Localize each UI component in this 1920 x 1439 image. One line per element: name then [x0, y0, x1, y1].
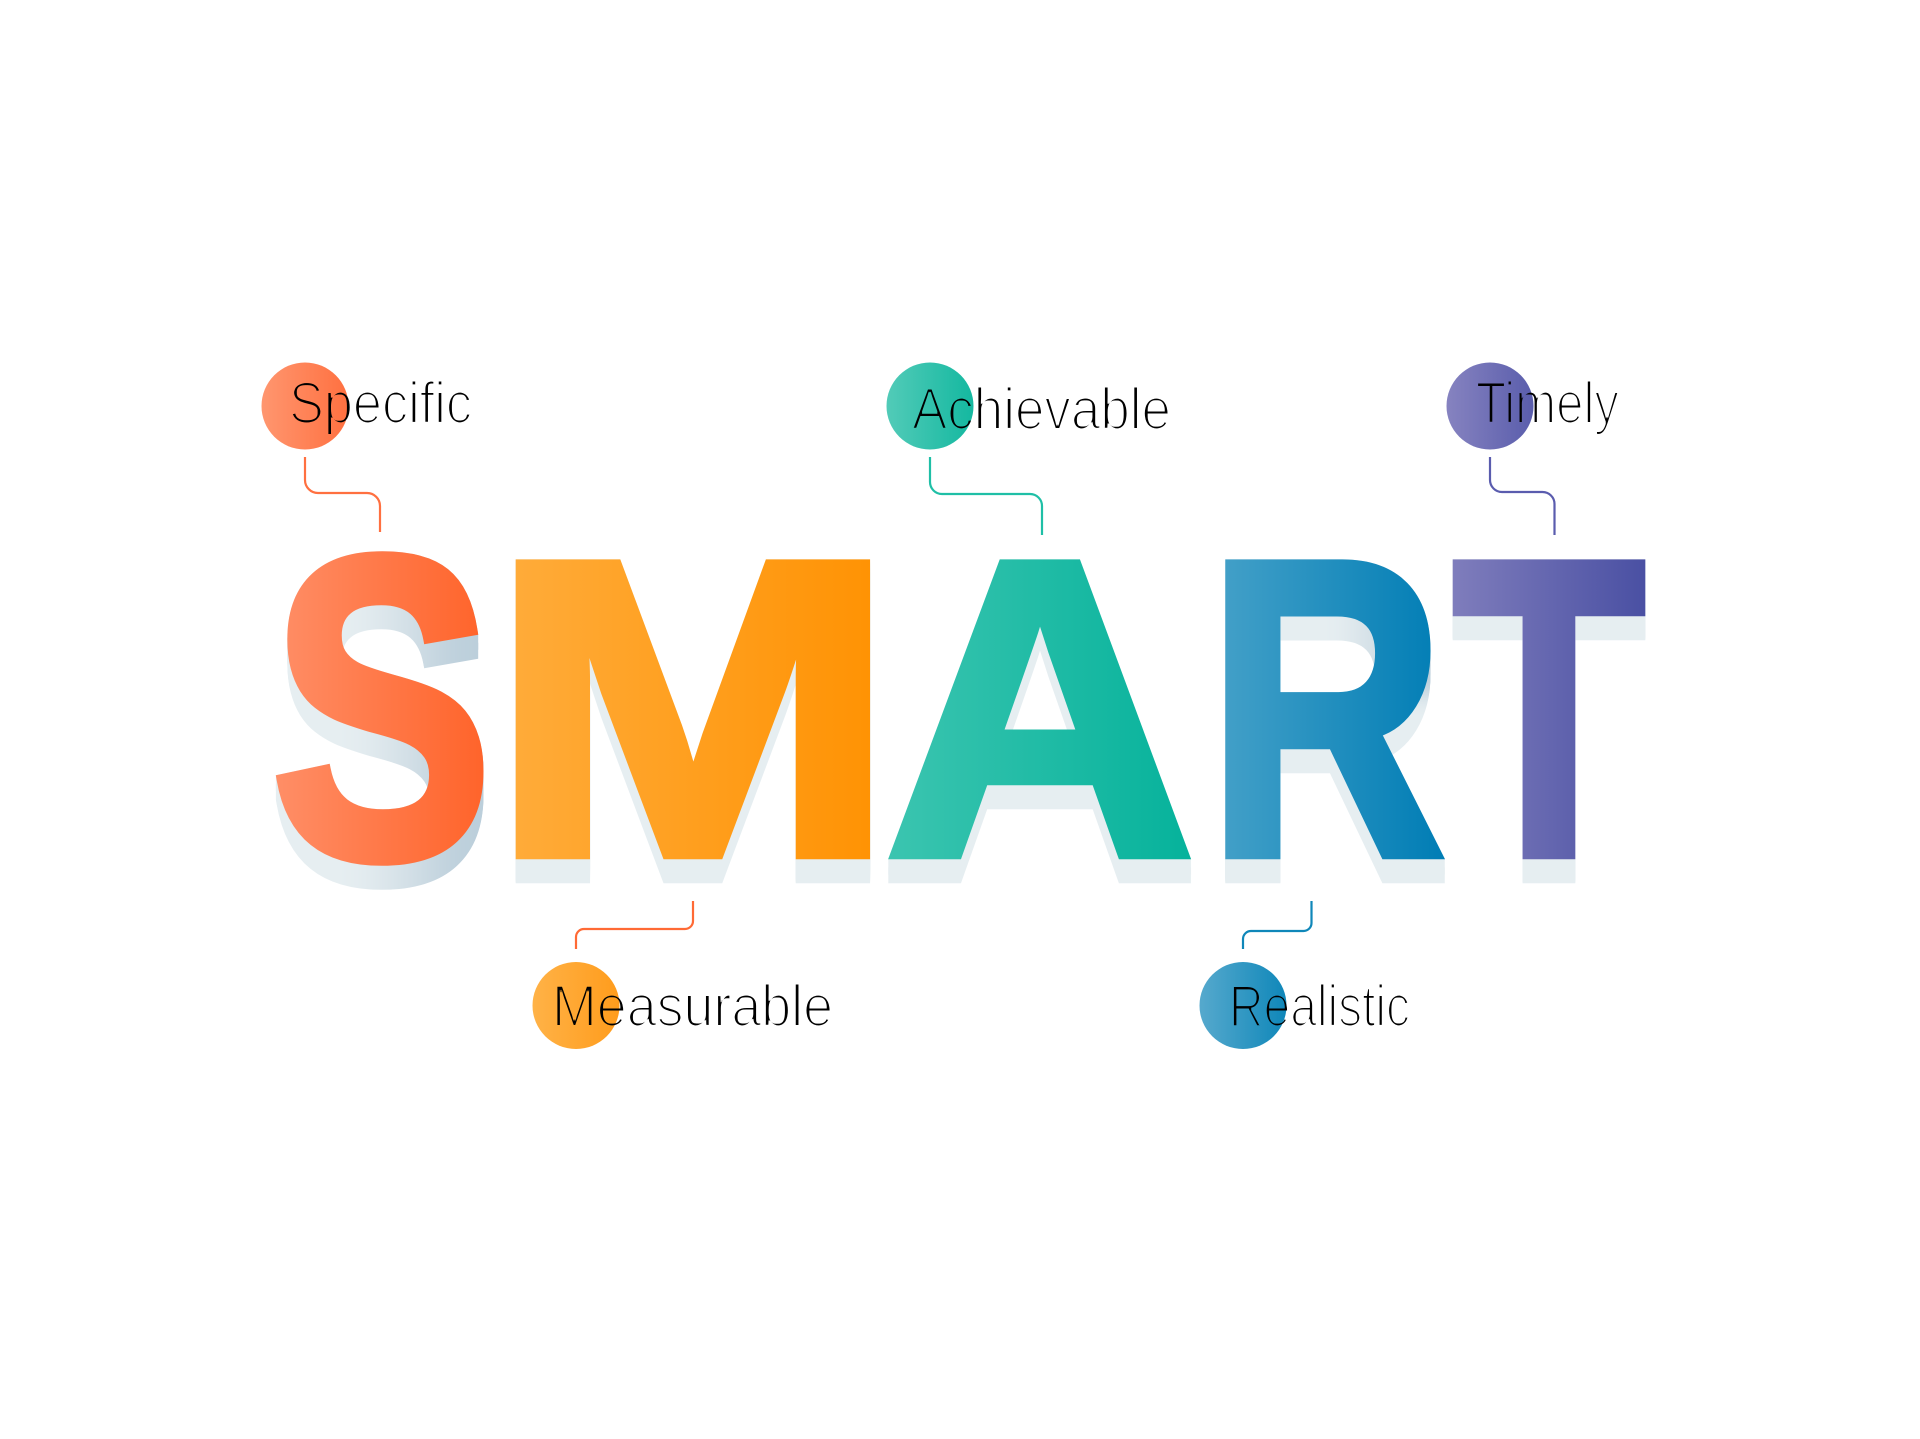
connector: Measurable: [576, 901, 693, 949]
callout: Measurable: [532, 901, 833, 1049]
letter S: S: [271, 468, 493, 948]
icon: Achievable circle: [886, 362, 974, 450]
label: Specific: Specific: [289, 371, 472, 436]
letter T: T: [1453, 472, 1645, 944]
callout: Realistic: [1200, 901, 1410, 1049]
connector: Timely: [1490, 457, 1554, 535]
callout: Achievable: [886, 362, 1171, 535]
letter M: M: [489, 473, 897, 944]
callout: Timely: [1446, 362, 1619, 535]
letter A: A: [885, 474, 1195, 944]
icon: Timely circle: [1446, 362, 1534, 450]
callout: Specific: [262, 362, 472, 532]
icon: Specific circle: [262, 362, 348, 450]
connector: Achievable: [930, 457, 1042, 535]
label: Measurable: Measurable: [552, 974, 833, 1039]
connector: Realistic: [1243, 901, 1312, 949]
label: Timely: Timely: [1476, 371, 1619, 436]
connector: Specific: [305, 457, 380, 532]
label: Achievable: Achievable: [912, 377, 1171, 442]
icon: Measurable circle: [532, 962, 620, 1049]
icon: Realistic circle: [1200, 962, 1286, 1049]
label: Realistic: Realistic: [1229, 974, 1410, 1039]
letter R: R: [1207, 474, 1445, 945]
